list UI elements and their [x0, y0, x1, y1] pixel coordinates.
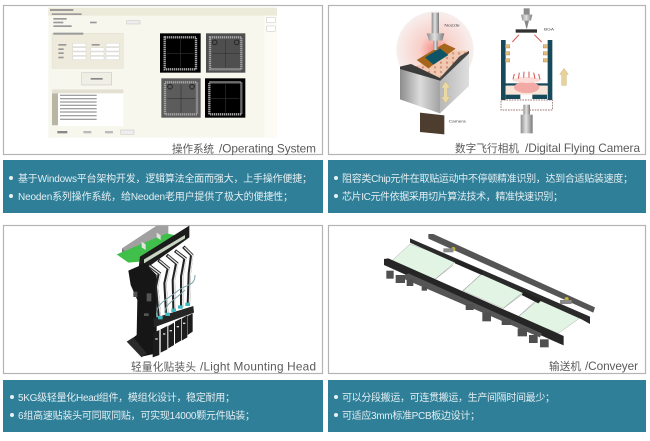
software screenshot — [48, 8, 277, 138]
bullet line 1: 可以分段搬运，可连贯搬运，生产间隔时间最少； — [342, 391, 555, 404]
panel: digital flying camera — [328, 6, 646, 155]
arrow: up — [560, 68, 568, 85]
panel: digital flying camera description — [328, 160, 646, 213]
bullet line 1: 阻容类Chip元件在取贴运动中不停顿精准识别，达到合适贴装速度； — [342, 172, 633, 185]
caption: 轻量化贴装头 — [131, 360, 196, 374]
diagram: BGA section — [501, 8, 568, 133]
bullet line 2: 6组高速贴装头可同取同贴，可实现14000颗元件贴装； — [18, 409, 255, 422]
bullet line 1: 5KG级轻量化Head组件，模组化设计，稳定耐用； — [18, 391, 235, 404]
illustration: mounting head — [117, 226, 195, 357]
bullet line 1: 基于Windows平台架构开发，逻辑算法全面而强大，上手操作便捷； — [18, 172, 312, 185]
panel: operating system — [4, 6, 322, 156]
caption: 操作系统 — [172, 142, 214, 156]
bullet line 2: Neoden系列操作系统，给Neoden老用户提供了极大的便捷性； — [18, 190, 293, 203]
illustration: conveyer — [384, 234, 595, 347]
caption: /Digital Flying Camera — [525, 141, 640, 155]
bullet line 2: 可适应3mm标准PCB板边设计； — [342, 409, 480, 422]
arrow: vertical movement — [441, 81, 450, 103]
label: camera: Camera — [449, 119, 467, 124]
panel: conveyer — [328, 226, 646, 374]
caption: /Light Mounting Head — [200, 360, 316, 374]
panel: light mounting head description — [3, 380, 323, 432]
panel: operating system description — [3, 160, 323, 213]
panel: light mounting head — [4, 226, 322, 374]
caption: 数字飞行相机 — [455, 142, 519, 155]
caption: /Conveyer — [585, 359, 638, 373]
caption: 输送机 — [549, 360, 581, 373]
label: nozzle: Nozzle — [444, 22, 461, 27]
inspection images — [160, 33, 245, 118]
panel: conveyer description — [328, 380, 646, 432]
bullet line 2: 芯片IC元件依据采用切片算法技术，精准快速识别； — [342, 190, 563, 203]
diagram: nozzle and camera box — [396, 11, 474, 134]
label: BGA: BGA — [544, 26, 554, 31]
caption: /Operating System — [219, 142, 316, 156]
